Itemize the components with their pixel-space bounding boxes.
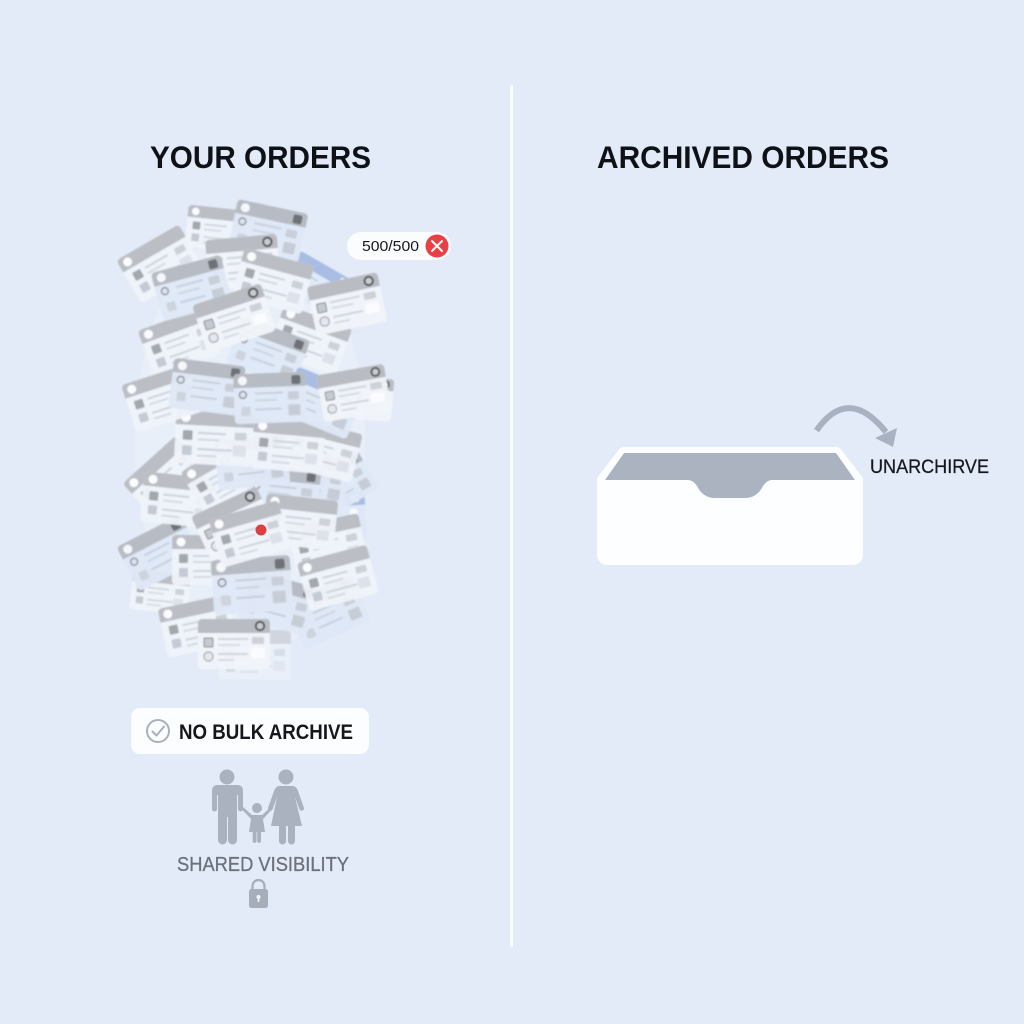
archive tray [597, 447, 863, 565]
label: shared visibility: SHARED VISIBILITY [177, 854, 349, 876]
limit badge: 500/500: 500/500 [362, 239, 419, 255]
callout: no bulk archive [131, 708, 369, 754]
red alert dot in card pile [256, 524, 266, 536]
icon: family [212, 770, 304, 844]
heading: archived orders: ARCHIVED ORDERS [597, 139, 889, 175]
pile of order cards [116, 199, 394, 680]
heading: your orders: YOUR ORDERS [150, 139, 371, 175]
callout: no bulk archive: NO BULK ARCHIVE [179, 721, 353, 744]
icon: padlock [249, 880, 268, 908]
center divider [510, 85, 513, 947]
label: unarchive: UNARCHIRVE [870, 456, 989, 478]
arrow: unarchive [816, 408, 897, 447]
limit badge: 500/500 [347, 232, 451, 260]
